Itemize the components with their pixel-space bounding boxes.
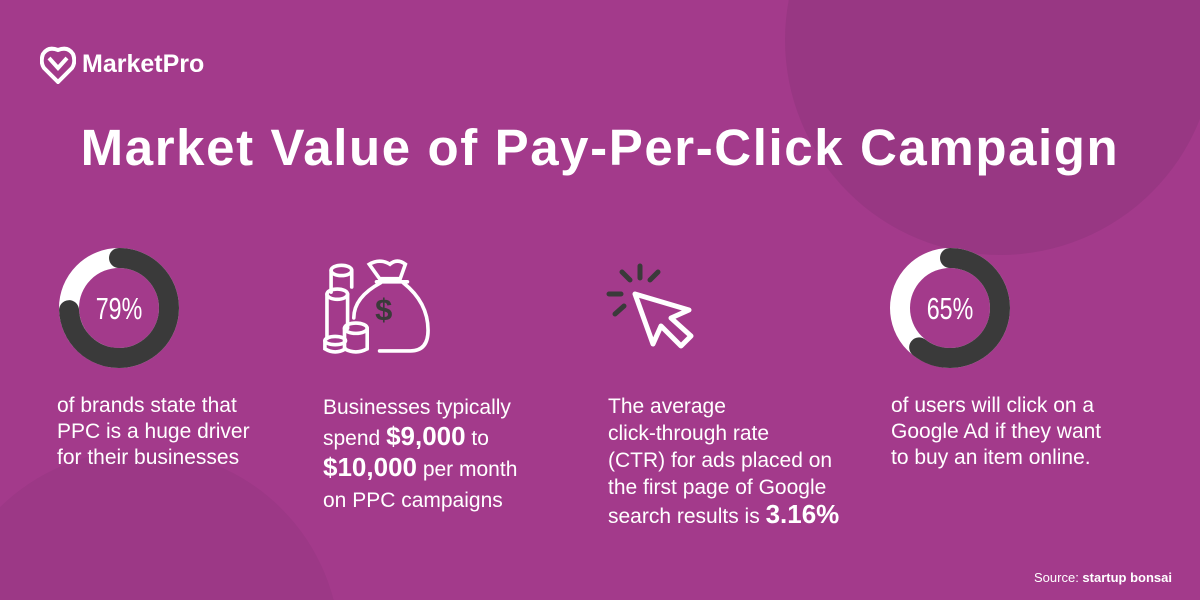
- text 3: The average: [608, 395, 726, 418]
- text 3: [608, 395, 839, 529]
- text 3: the first page of Google: [608, 476, 826, 499]
- icon: logo mark: [40, 46, 76, 84]
- text 3: click-through rate: [608, 422, 769, 445]
- text 2: on PPC campaigns: [323, 489, 503, 512]
- donut 65%: 65%: [927, 291, 973, 326]
- donut 79%: [59, 248, 179, 368]
- icon: money bag: $: [375, 292, 392, 327]
- text 1: of brands state that: [57, 394, 237, 417]
- text 1: for their businesses: [57, 446, 239, 469]
- text 3: (CTR) for ads placed on: [608, 449, 832, 472]
- text 1: [57, 394, 250, 469]
- text 2: $10,000 per month: [323, 452, 517, 482]
- donut 79%: 79%: [96, 291, 142, 326]
- source: Source: startup bonsai: [1034, 570, 1172, 585]
- logo: [40, 46, 204, 84]
- text 2: [323, 396, 517, 512]
- logo text: MarketPro: [82, 50, 204, 78]
- donut 65%: [890, 248, 1010, 368]
- title: Market Value of Pay-Per-Click Campaign: [81, 119, 1119, 176]
- text 4: [891, 394, 1101, 469]
- text 3: search results is 3.16%: [608, 499, 839, 529]
- icon: money bag: [323, 259, 430, 354]
- icon: cursor click: [606, 264, 694, 348]
- text 4: Google Ad if they want: [891, 420, 1101, 443]
- text 2: spend $9,000 to: [323, 421, 489, 451]
- text 2: Businesses typically: [323, 396, 511, 419]
- text 4: of users will click on a: [891, 394, 1094, 417]
- text 1: PPC is a huge driver: [57, 420, 250, 443]
- text 4: to buy an item online.: [891, 446, 1091, 469]
